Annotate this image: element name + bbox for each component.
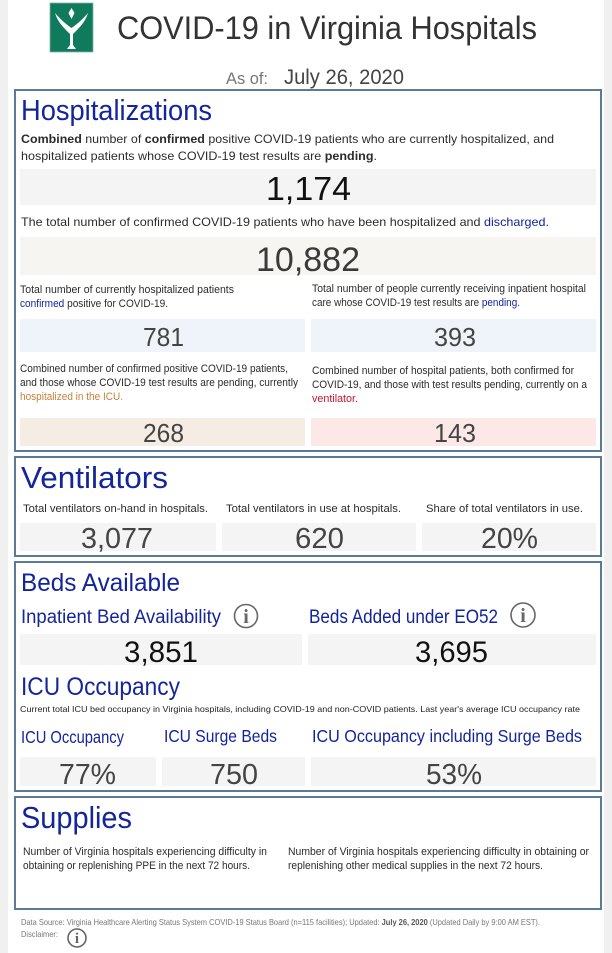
column: in use: 620: [295, 523, 344, 555]
subheading: beds added: Beds Added under EO52: [309, 607, 498, 628]
panel: supplies: [15, 797, 601, 909]
description: combined hospitalized: Combined number of confirmed positive COVID-19 patients who are currently hospitalized, and: [21, 132, 554, 146]
column: in use: [222, 503, 416, 555]
description: ICU: hospitalized in the ICU.: [20, 391, 123, 403]
column: ICU surge beds: [162, 726, 305, 791]
stat: pending: [311, 319, 596, 352]
stat: confirmed: 781: [143, 322, 184, 352]
title: COVID-19 in Virginia Hospitals: [117, 10, 537, 46]
as-of date: July 26, 2020: [284, 66, 404, 89]
description: other medical supplies: Number of Virginia hospitals experiencing difficulty in obtaining or: [288, 846, 589, 858]
column: ICU surge beds: 750: [210, 759, 258, 791]
footer: data source: Data Source: Virginia Healthcare Alerting Status System COVID-19 Status Board (n=115 facilities); Updated: July 26, 2020 (Updated Daily by 9:00 AM EST).: [21, 917, 540, 927]
description: other medical supplies: replenishing other medical supplies in the next 72 hours.: [288, 860, 543, 872]
description: ICU occupancy: Current total ICU bed occupancy in Virginia hospitals, including COVID-19 and non-COVID patients. Last year's average ICU occupancy rate: [20, 704, 580, 714]
icon: disclaimer info: i: [75, 931, 79, 947]
description: confirmed: Total number of currently hospitalized patients: [20, 284, 234, 296]
description: pending: care whose COVID-19 test results are pending.: [312, 297, 520, 309]
column: on-hand: [20, 503, 216, 555]
description: ventilator: [312, 365, 588, 405]
panel: ventilators: [15, 457, 601, 556]
description: ICU: [20, 363, 298, 403]
as-of date: [226, 66, 404, 89]
icon: info: [234, 604, 258, 628]
icon: disclaimer info: [68, 929, 86, 947]
as-of date: As of:: [226, 69, 268, 88]
stat: ventilator: 143: [434, 418, 476, 448]
description: combined hospitalized: hospitalized patients whose COVID-19 test results are pending.: [21, 149, 377, 163]
panel: beds and ICU: [15, 562, 601, 791]
description: confirmed: [20, 284, 234, 310]
heading: beds available: Beds Available: [21, 569, 180, 597]
icon: info: i: [243, 606, 249, 628]
column: ICU occupancy including surge beds: [311, 726, 596, 791]
icon: hospital association logo: [50, 3, 93, 52]
description: PPE: [23, 846, 267, 872]
column: ICU occupancy including surge beds: ICU Occupancy including Surge Beds: [312, 726, 582, 746]
description: ventilator: ventilator.: [312, 393, 358, 405]
icon: info: [511, 603, 535, 627]
column: ICU occupancy: ICU Occupancy: [21, 727, 124, 747]
description: ICU: Combined number of confirmed positive COVID-19 patients,: [20, 363, 288, 375]
column: on-hand: Total ventilators on-hand in hospitals.: [23, 503, 208, 515]
stat: discharged: 10,882: [256, 241, 360, 279]
heading: ICU occupancy: ICU Occupancy: [21, 673, 180, 701]
subheading: inpatient bed availability: Inpatient Bed Availability: [21, 607, 221, 628]
stat: confirmed: [20, 319, 305, 352]
description: PPE: obtaining or replenishing PPE in the next 72 hours.: [23, 860, 250, 872]
description: ventilator: COVID-19, and those with test results pending, currently on a: [312, 379, 588, 391]
footer: disclaimer: Disclaimer:: [21, 929, 58, 939]
stat: discharged: [20, 237, 596, 279]
stat: beds added: [308, 634, 596, 669]
stat: ventilator: [311, 418, 596, 448]
stat: beds added: 3,695: [415, 636, 488, 669]
column: ICU occupancy: [20, 727, 156, 791]
heading: hospitalizations: Hospitalizations: [21, 95, 212, 127]
panel: hospitalizations: [15, 90, 601, 451]
icon: info: i: [520, 605, 526, 627]
stat: ICU: 268: [143, 418, 184, 448]
description: combined hospitalized: [21, 132, 554, 163]
description: discharged: The total number of confirmed COVID-19 patients who have been hospitalized and discharged.: [21, 215, 549, 229]
column: on-hand: 3,077: [81, 523, 153, 555]
stat: combined hospitalized: [20, 169, 596, 207]
column: share in use: 20%: [481, 523, 538, 555]
heading: ventilators: Ventilators: [21, 460, 168, 495]
column: ICU occupancy including surge beds: 53%: [426, 759, 482, 791]
column: ICU occupancy: 77%: [59, 759, 116, 791]
column: share in use: Share of total ventilators in use.: [426, 503, 583, 515]
column: ICU surge beds: ICU Surge Beds: [164, 726, 277, 746]
description: ventilator: Combined number of hospital patients, both confirmed for: [312, 365, 574, 377]
description: ICU: and those whose COVID-19 test results are pending, currently: [20, 377, 298, 389]
heading: supplies: Supplies: [21, 800, 132, 835]
column: in use: Total ventilators in use at hospitals.: [226, 503, 401, 515]
description: other medical supplies: [288, 846, 589, 872]
description: confirmed: confirmed positive for COVID-19.: [20, 298, 168, 310]
stat: inpatient beds: 3,851: [124, 636, 198, 669]
description: pending: Total number of people currently receiving inpatient hospital: [312, 283, 586, 295]
stat: inpatient beds: [20, 634, 302, 669]
description: pending: [312, 283, 586, 309]
description: PPE: Number of Virginia hospitals experiencing difficulty in: [23, 846, 267, 858]
stat: combined hospitalized: 1,174: [266, 170, 351, 207]
stat: pending: 393: [434, 322, 476, 352]
column: share in use: [422, 503, 596, 555]
stat: ICU: [20, 418, 305, 448]
